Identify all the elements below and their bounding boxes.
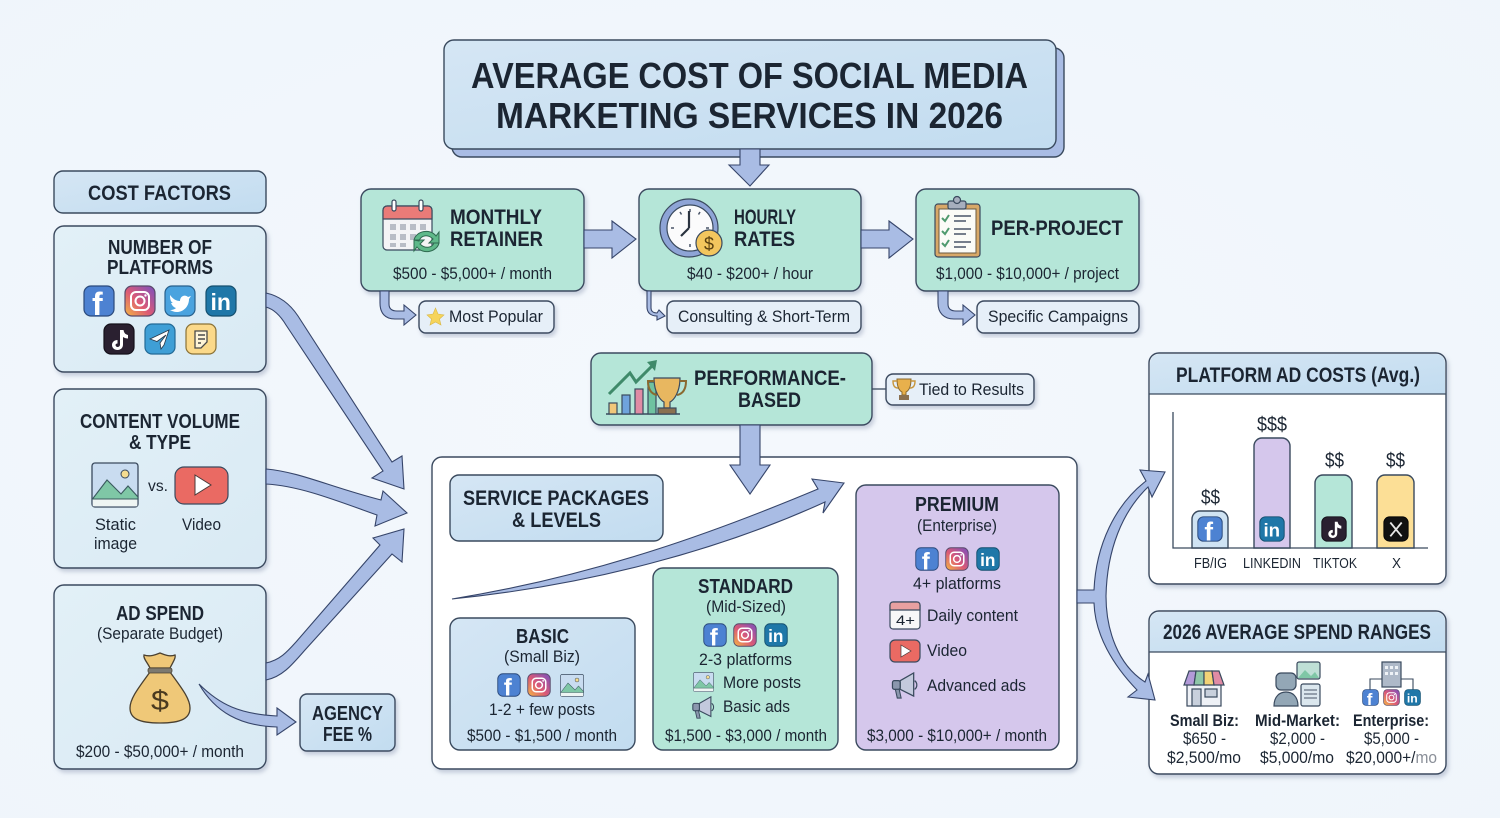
panel: monthly retainer (361, 189, 584, 291)
panel: hourly rates (639, 189, 861, 291)
arrow: monthly to most popular (380, 291, 416, 325)
panel: monthly retainer: MONTHLY (450, 206, 542, 229)
icon: video (175, 467, 228, 504)
bar chart: $$ (1386, 450, 1405, 472)
bar chart: $$$ (1257, 414, 1287, 436)
package: standard: (Mid-Sized) (706, 597, 786, 616)
panel: content volume and type (54, 389, 266, 568)
icon: building with platforms (1363, 662, 1420, 709)
tier: mid-market: Mid-Market: (1255, 711, 1340, 730)
icon: clipboard checklist (935, 196, 980, 257)
package: premium: Daily content (927, 606, 1018, 625)
bar chart: TIKTOK (1313, 555, 1357, 572)
panel: cost factors heading (54, 171, 266, 213)
panel: performance-based: BASED (738, 389, 801, 412)
package: basic: 1-2 + few posts (489, 700, 595, 719)
panel: number of platforms: NUMBER OF (108, 237, 212, 259)
panel: hourly rates: HOURLY (734, 206, 796, 229)
bar chart: FB/IG (1194, 555, 1227, 572)
icon: team with content (1274, 662, 1320, 706)
panel: platform ad costs (1149, 353, 1446, 584)
panel: content volume and type: & TYPE (129, 432, 191, 454)
panel: hourly rates: $40 - $200+ / hour (687, 264, 813, 283)
callout: consulting and short-term: Consulting & Short-Term (678, 307, 850, 326)
panel: content volume and type: CONTENT VOLUME (80, 411, 240, 433)
package: standard: STANDARD (698, 576, 793, 598)
icon: money bag (130, 653, 190, 723)
package: premium: (Enterprise) (917, 516, 997, 535)
icon: premium video (890, 640, 920, 662)
package: premium: PREMIUM (915, 494, 999, 516)
icon: small trophy (893, 379, 915, 400)
callout: specific campaigns (977, 301, 1139, 333)
bar chart: LINKEDIN (1243, 555, 1301, 572)
heading: service packages and levels: & LEVELS (512, 509, 601, 532)
panel: content volume and type: vs. (148, 478, 168, 495)
icon: money bag: $ (151, 685, 169, 716)
callout: specific campaigns: Specific Campaigns (988, 307, 1128, 326)
panel: content volume and type: Video (182, 515, 221, 534)
tier: mid-market: $2,000 - (1270, 729, 1325, 748)
tier: small business: $2,500/mo (1167, 748, 1241, 767)
package: basic: BASIC (516, 626, 569, 648)
tier: enterprise: $5,000 - (1364, 729, 1419, 748)
arrow: ad spend to agency fee (199, 684, 296, 735)
panel: per-project: PER-PROJECT (991, 217, 1123, 240)
callout: tied to results (872, 374, 1034, 405)
package: premium (856, 485, 1059, 750)
panel: platform ad costs: PLATFORM AD COSTS (Avg.) (1176, 364, 1420, 387)
icon: static image (92, 463, 138, 507)
panel: 2026 average spend ranges (1149, 611, 1446, 774)
panel: hourly rates: RATES (734, 228, 795, 251)
icon: clock with coin: $ (704, 234, 714, 254)
tier: enterprise: $20,000+/mo (1346, 748, 1437, 767)
package: standard: Basic ads (723, 697, 790, 716)
panel: cost factors heading: COST FACTORS (88, 182, 231, 205)
package: standard (653, 568, 838, 750)
package: standard: $1,500 - $3,000 / month (665, 726, 827, 745)
panel: per-project (916, 189, 1139, 291)
callout: most popular: Most Popular (449, 307, 543, 326)
panel: agency fee (300, 694, 395, 751)
panel: monthly retainer: $500 - $5,000+ / month (393, 264, 552, 283)
arrow: performance to packages (730, 425, 770, 494)
arrow: hourly to per-project (861, 221, 913, 258)
icon: growth chart and trophy (606, 360, 686, 414)
arrow: per-project to campaigns (938, 291, 975, 325)
panel: agency fee: AGENCY (312, 703, 384, 725)
panel: content volume and type: Static (95, 515, 136, 534)
package: basic (450, 618, 635, 750)
panel: ad spend: $200 - $50,000+ / month (76, 742, 244, 761)
panel: per-project: $1,000 - $10,000+ / project (936, 264, 1119, 283)
package: premium: $3,000 - $10,000+ / month (867, 726, 1047, 745)
bar chart: X (1392, 555, 1401, 572)
heading: service packages and levels (450, 475, 663, 541)
arrow: packages to platform panels (1077, 470, 1165, 700)
arrow: monthly to hourly (584, 221, 636, 258)
package: premium: 4+ platforms (913, 574, 1001, 593)
tier: small business: $650 - (1183, 729, 1226, 748)
icon: daily calendar (890, 602, 920, 629)
bar chart: $$ (1325, 450, 1344, 472)
panel: content volume and type: image (94, 534, 137, 553)
panel: number of platforms: PLATFORMS (107, 257, 213, 279)
arrow: content to packages (266, 469, 407, 526)
callout: consulting and short-term (667, 301, 861, 333)
arrow: platforms to packages (266, 293, 404, 489)
callout: tied to results: Tied to Results (919, 380, 1024, 399)
panel: performance-based (591, 353, 872, 425)
tier: mid-market (1255, 662, 1340, 767)
icon: daily calendar: 4+ (896, 612, 915, 628)
callout: most popular (419, 301, 554, 333)
panel: 2026 average spend ranges: 2026 AVERAGE SPEND RANGES (1163, 621, 1431, 644)
title: AVERAGE COST OF SOCIAL MEDIA (471, 55, 1028, 96)
package: standard: More posts (723, 673, 801, 692)
icon: calendar with refresh (383, 200, 439, 252)
panel: performance-based: PERFORMANCE- (694, 367, 846, 390)
icon: star (427, 308, 444, 325)
heading: service packages and levels: SERVICE PACKAGES (463, 487, 649, 510)
arrow: hourly to consulting (647, 291, 665, 320)
icon: clock with coin (660, 199, 722, 257)
package: premium: Video (927, 641, 967, 660)
panel: number of platforms (54, 226, 266, 372)
tier: mid-market: $5,000/mo (1260, 748, 1334, 767)
title (444, 40, 1064, 157)
icons: social platforms (84, 286, 236, 354)
tier: small business: Small Biz: (1170, 711, 1239, 730)
arrow: rising package levels (452, 479, 844, 599)
package: basic: $500 - $1,500 / month (467, 726, 617, 745)
bar chart: $$ (1201, 487, 1220, 509)
package: basic: (Small Biz) (504, 647, 580, 666)
arrow: title to pricing models (729, 149, 769, 186)
tier: enterprise (1346, 662, 1437, 767)
panel: service packages (432, 457, 1077, 769)
package: standard: 2-3 platforms (699, 650, 792, 669)
tier: small business (1167, 671, 1241, 767)
panel: ad spend: AD SPEND (116, 603, 204, 625)
title: MARKETING SERVICES IN 2026 (496, 95, 1003, 136)
panel: ad spend: (Separate Budget) (97, 624, 223, 643)
panel: agency fee: FEE % (323, 724, 372, 746)
icon: store (1184, 671, 1224, 706)
arrow: ad spend to packages (266, 529, 404, 680)
bar chart (1173, 412, 1428, 572)
tier: enterprise: Enterprise: (1353, 711, 1429, 730)
panel: ad spend (54, 585, 266, 769)
package: premium: Advanced ads (927, 676, 1026, 695)
panel: monthly retainer: RETAINER (450, 228, 543, 251)
